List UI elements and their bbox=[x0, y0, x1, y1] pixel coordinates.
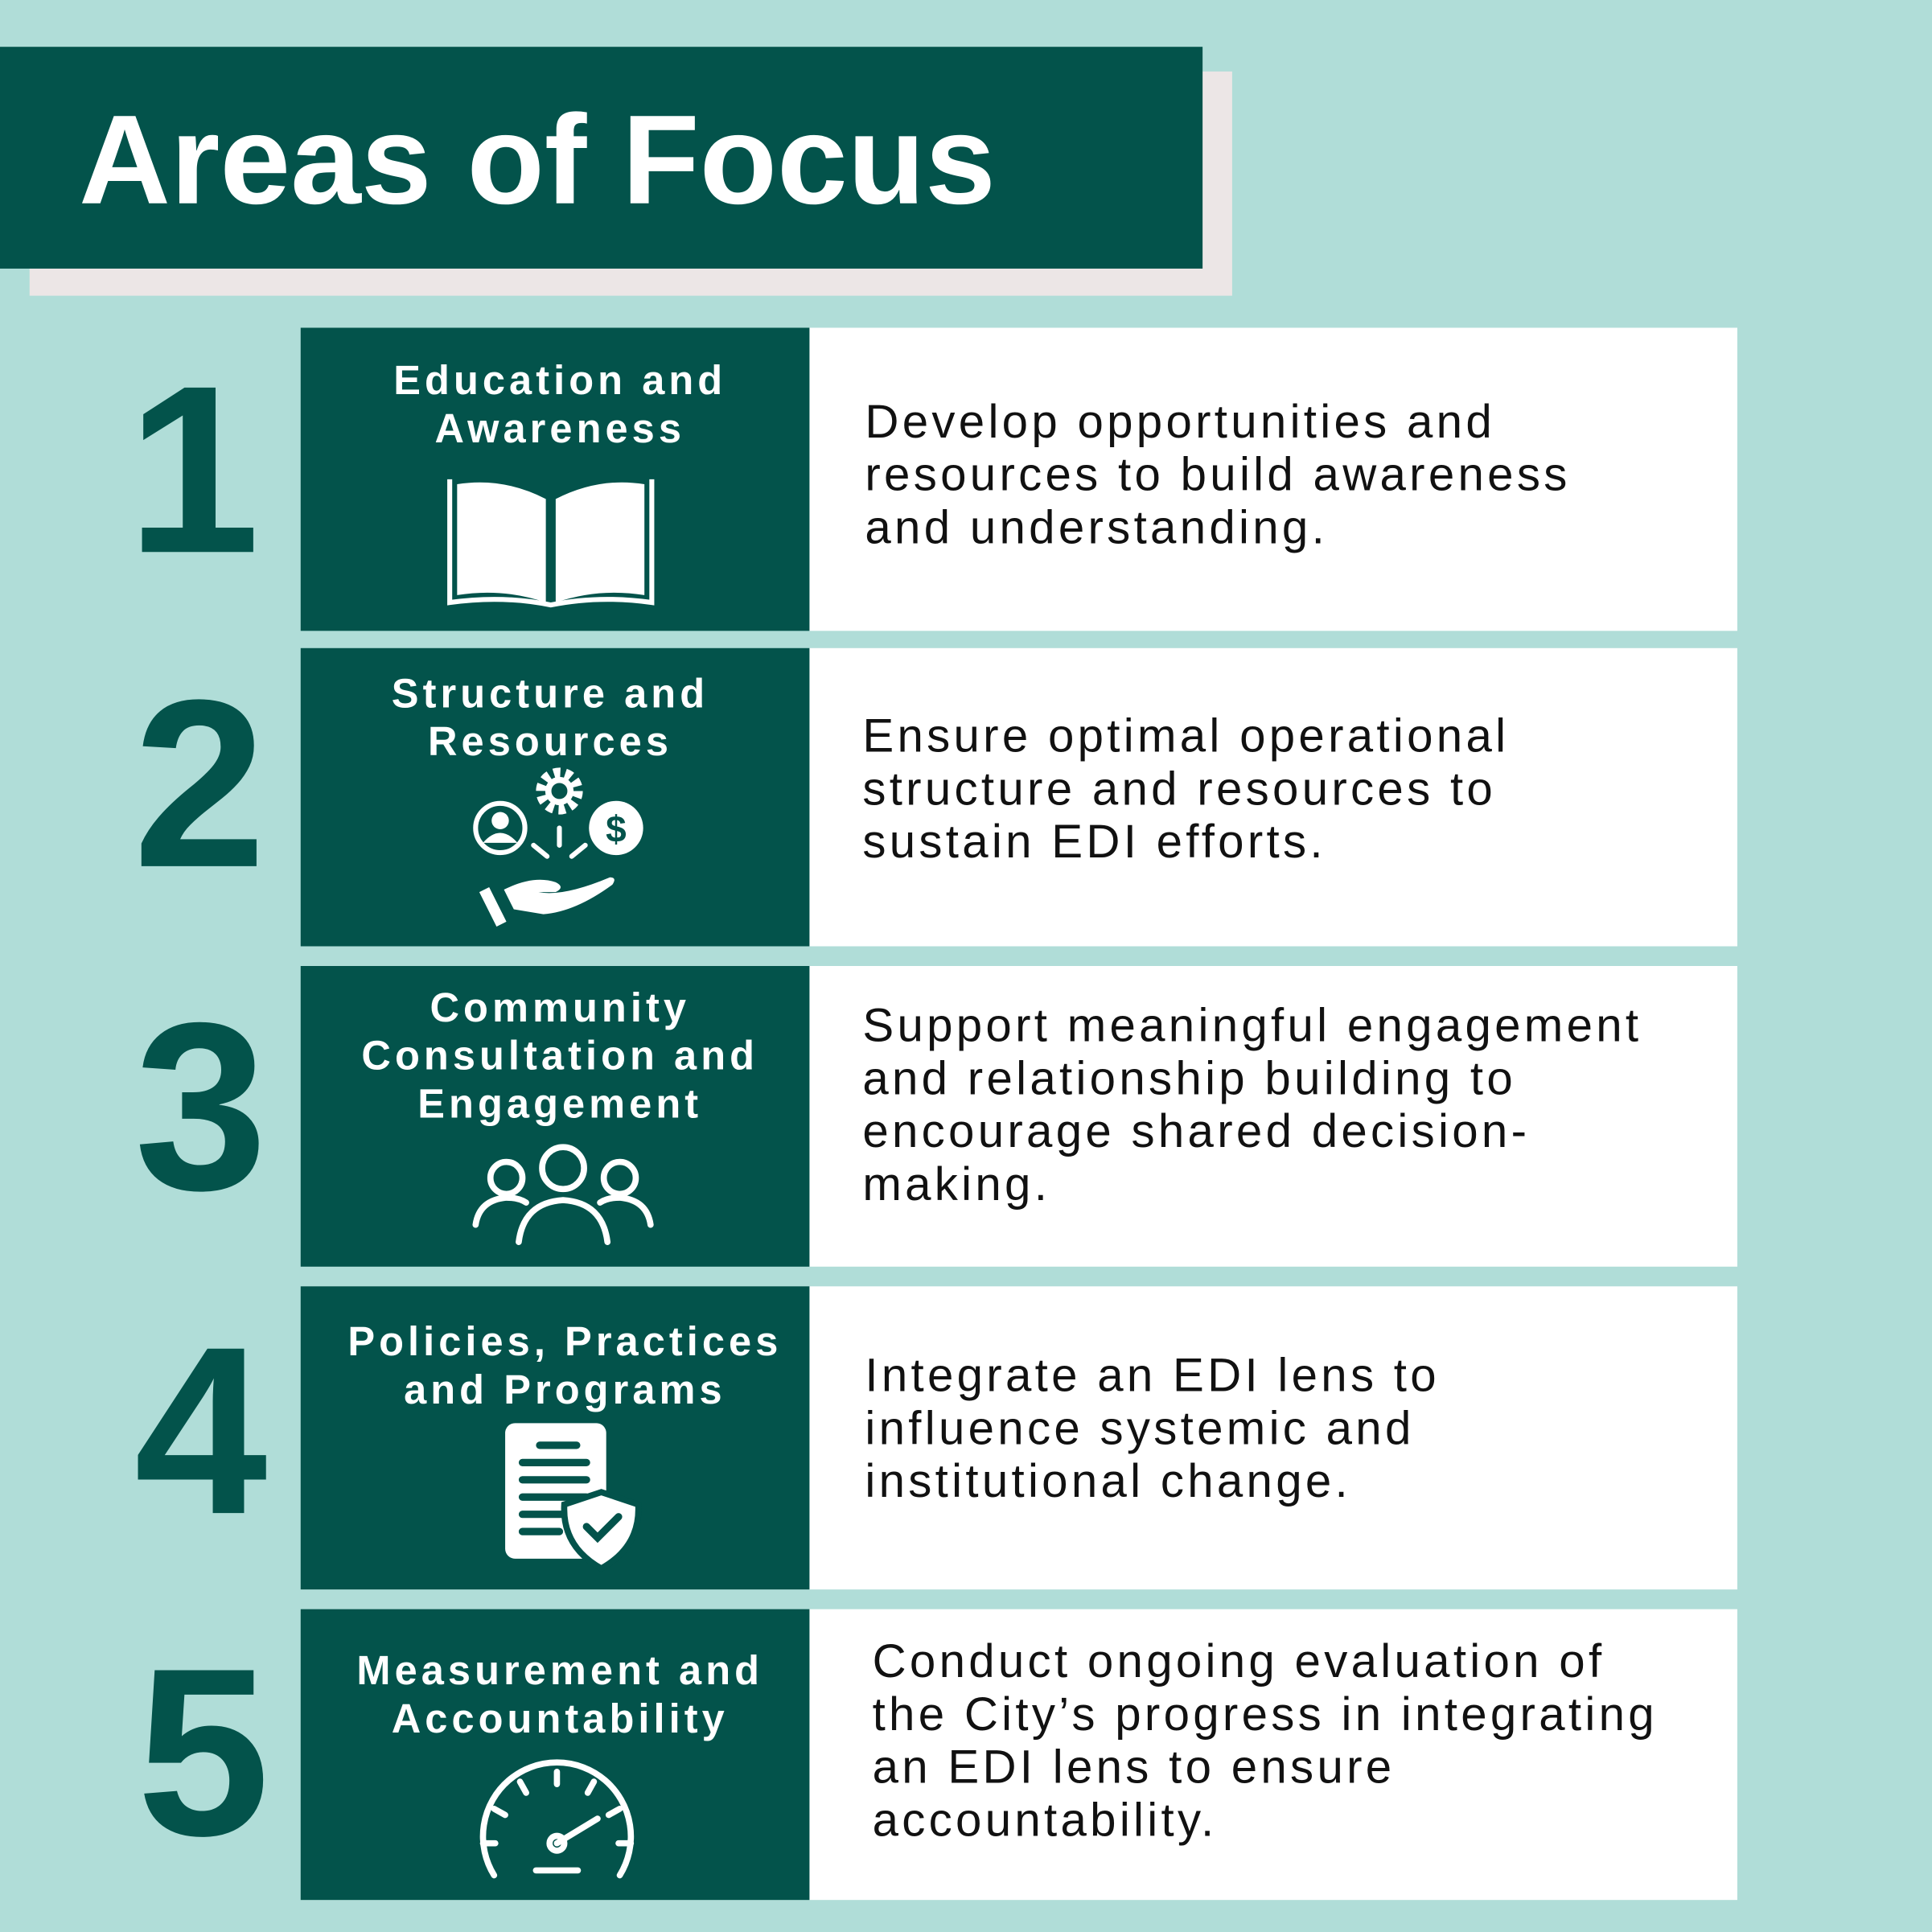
description 5 bbox=[873, 1636, 1658, 1847]
description 3: making. bbox=[862, 1160, 1050, 1211]
panel: heading 1 bbox=[301, 327, 809, 631]
description 4: influence systemic and bbox=[865, 1404, 1415, 1455]
row 4 bbox=[134, 1286, 1737, 1589]
row 2 bbox=[134, 648, 1737, 946]
description 3 bbox=[862, 1001, 1642, 1211]
title bar bbox=[0, 47, 1202, 269]
description 4 bbox=[865, 1350, 1440, 1508]
panel: description 2 bbox=[809, 648, 1737, 946]
description 1: Develop opportunities and bbox=[865, 397, 1495, 449]
heading 5 bbox=[356, 1647, 763, 1741]
panel: description 3 bbox=[809, 966, 1737, 1267]
heading 2: Resources bbox=[428, 718, 672, 764]
heading 1: Education and bbox=[393, 357, 726, 403]
number 5: 5 bbox=[137, 1619, 269, 1886]
description 1: resources to build awareness bbox=[865, 450, 1571, 501]
icon: hand with resources bbox=[473, 767, 643, 927]
heading 4: Policies, Practices bbox=[347, 1318, 782, 1364]
row 1 bbox=[127, 328, 1737, 631]
heading 3: Consultation and bbox=[361, 1033, 758, 1078]
heading 3: Community bbox=[430, 984, 690, 1030]
number 2: 2 bbox=[134, 651, 266, 918]
panel: heading 4 bbox=[301, 1286, 809, 1589]
title: Areas of Focus bbox=[79, 88, 996, 230]
heading 5: Measurement and bbox=[356, 1647, 763, 1693]
description 5: Conduct ongoing evaluation of bbox=[873, 1636, 1605, 1688]
description 2: Ensure optimal operational bbox=[862, 711, 1509, 763]
panel: description 1 bbox=[809, 327, 1737, 631]
description 1 bbox=[865, 397, 1571, 554]
panel: heading 2 bbox=[301, 648, 809, 946]
description 4: institutional change. bbox=[865, 1457, 1351, 1508]
heading 4: and Programs bbox=[404, 1367, 726, 1412]
heading 1: Awareness bbox=[434, 405, 685, 451]
description 5: the City’s progress in integrating bbox=[873, 1689, 1658, 1741]
description 1: and understanding. bbox=[865, 503, 1328, 554]
description 2 bbox=[862, 711, 1509, 869]
description 3: and relationship building to bbox=[862, 1054, 1516, 1105]
icon: hand with resources: $ bbox=[606, 808, 627, 849]
description 5: accountability. bbox=[873, 1795, 1217, 1847]
icon: book bbox=[447, 479, 655, 608]
row 5 bbox=[137, 1609, 1737, 1900]
panel: description 4 bbox=[809, 1286, 1737, 1589]
heading 3: Engagement bbox=[417, 1080, 702, 1126]
icon: gauge bbox=[479, 1759, 634, 1879]
number 1: 1 bbox=[127, 336, 260, 604]
description 5: an EDI lens to ensure bbox=[873, 1742, 1395, 1794]
row 3 bbox=[134, 966, 1737, 1267]
title shadow bbox=[30, 72, 1232, 296]
description 2: sustain EDI efforts. bbox=[862, 817, 1326, 869]
description 3: Support meaningful engagement bbox=[862, 1001, 1642, 1052]
panel: description 5 bbox=[809, 1609, 1737, 1900]
heading 5: Accountability bbox=[392, 1696, 729, 1741]
description 2: structure and resources to bbox=[862, 764, 1496, 816]
heading 4 bbox=[347, 1318, 782, 1412]
heading 1 bbox=[393, 357, 726, 451]
number 4: 4 bbox=[134, 1297, 267, 1565]
panel: heading 3 bbox=[301, 966, 809, 1267]
heading 3 bbox=[361, 984, 758, 1126]
icon: people bbox=[473, 1144, 654, 1245]
description 3: encourage shared decision- bbox=[862, 1107, 1530, 1158]
heading 2 bbox=[392, 670, 709, 764]
description 4: Integrate an EDI lens to bbox=[865, 1350, 1440, 1402]
number 3: 3 bbox=[134, 973, 267, 1241]
icon: document with shield bbox=[505, 1423, 635, 1565]
panel: heading 5 bbox=[301, 1609, 809, 1900]
heading 2: Structure and bbox=[392, 670, 709, 716]
